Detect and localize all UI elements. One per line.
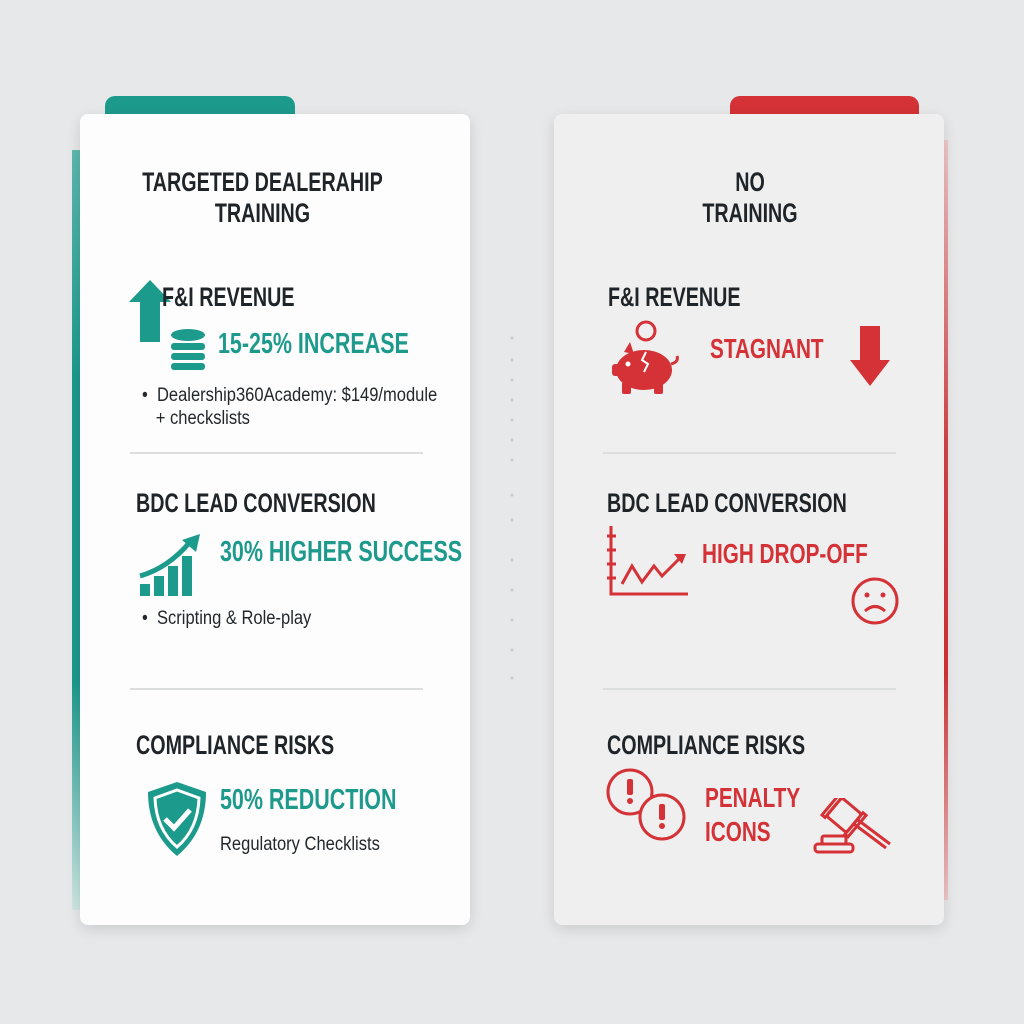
stat: reduction: 50% REDUCTION <box>220 784 396 816</box>
label: compliance: COMPLIANCE RISKS <box>607 730 805 760</box>
icon: down arrow <box>850 326 890 386</box>
icon: bar chart up <box>139 534 200 596</box>
bullet text: • Scripting & Role-play <box>142 608 311 629</box>
label: F&I revenue: F&I REVENUE <box>162 282 295 312</box>
stat: penalty icons: PENALTY <box>705 782 800 813</box>
heading <box>142 167 383 228</box>
icon: coins <box>171 329 205 370</box>
panel: targeted training <box>80 114 470 925</box>
teal edge stripe <box>72 150 80 910</box>
icon: up arrow <box>129 280 171 342</box>
stat: higher success: 30% HIGHER SUCCESS <box>220 536 462 568</box>
heading: TRAINING <box>702 198 798 228</box>
connector: dotted divider <box>510 336 514 680</box>
stat: high drop-off: HIGH DROP-OFF <box>702 538 868 569</box>
teal tab <box>105 96 295 126</box>
bullet text: + checkslists <box>156 408 250 429</box>
icon: broken piggy bank <box>612 320 679 394</box>
red tab <box>730 96 919 126</box>
bullet text: • Dealership360Academy: $149/module <box>142 385 437 406</box>
red edge stripe <box>942 140 948 900</box>
heading: NO <box>735 167 765 197</box>
icon: gavel <box>814 798 891 854</box>
stat: penalty icons: ICONS <box>705 816 771 847</box>
heading: TARGETED DEALERAHIP <box>142 167 383 197</box>
icon: sad face <box>852 578 898 624</box>
bullet text <box>142 385 437 429</box>
sub text: Regulatory Checklists <box>220 834 380 855</box>
label: F&I revenue: F&I REVENUE <box>608 282 741 312</box>
icon: alert circles <box>606 768 686 840</box>
heading: TRAINING <box>215 198 310 228</box>
panel: no training <box>554 114 944 925</box>
icon: shield <box>148 782 206 856</box>
label: BDC: BDC LEAD CONVERSION <box>136 488 376 518</box>
label: BDC: BDC LEAD CONVERSION <box>607 488 847 518</box>
label: compliance: COMPLIANCE RISKS <box>136 730 334 760</box>
heading <box>702 167 798 228</box>
icon: erratic chart <box>607 526 688 596</box>
stat: stagnant: STAGNANT <box>710 333 824 364</box>
stat: increase: 15-25% INCREASE <box>218 328 409 360</box>
stat: penalty icons <box>705 782 800 847</box>
